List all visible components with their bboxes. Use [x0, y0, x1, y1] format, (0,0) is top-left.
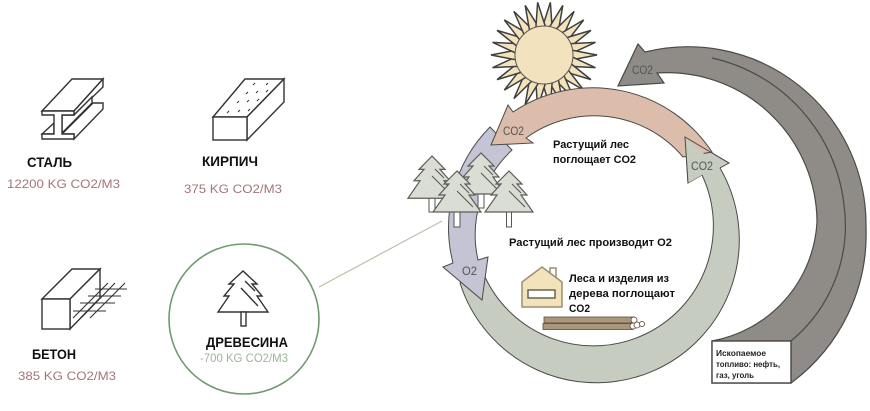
- text: wood stores CO2: [569, 273, 676, 315]
- circle outline: [169, 244, 319, 394]
- label: wood: ДРЕВЕСИНА: [206, 334, 288, 350]
- label: fossil fuel CO2: CO2: [632, 63, 653, 77]
- icon: tree: [218, 271, 268, 326]
- icon: steel beam: [42, 79, 103, 139]
- value: steel: 12200 KG CO2/M3: [7, 177, 120, 191]
- text: fossil fuels: [716, 348, 780, 380]
- label: brick: КИРПИЧ: [202, 153, 258, 169]
- text: wood stores CO2: Леса и изделия из: [569, 273, 670, 285]
- value: concrete: 385 KG CO2/M3: [18, 369, 116, 383]
- material: steel: [7, 79, 120, 191]
- text: forest absorbs CO2: [553, 139, 636, 166]
- connector line: [319, 221, 442, 287]
- text: fossil fuels: Ископаемое: [716, 348, 766, 358]
- text: fossil fuels: топливо: нефть,: [716, 359, 780, 369]
- label: O2: O2: [462, 264, 477, 278]
- value: wood: -700 KG CO2/M3: [200, 351, 288, 365]
- label: pink CO2: CO2: [503, 124, 524, 138]
- icon: brick: [213, 79, 284, 140]
- text: forest absorbs CO2: поглощает CO2: [553, 154, 636, 166]
- text: forest absorbs CO2: Растущий лес: [553, 139, 629, 151]
- arrow head: green over pink: [685, 137, 729, 183]
- icon: house: [522, 267, 562, 307]
- text: forest produces O2: Растущий лес производит O2: [509, 237, 672, 249]
- icon: concrete block with rebar: [42, 269, 127, 329]
- material: brick: [184, 79, 284, 196]
- icon: sun: [491, 2, 597, 108]
- arrow: fossil fuel CO2: [618, 44, 866, 383]
- material: wood circle: [169, 244, 319, 394]
- arrow: forest produces O2: [443, 127, 512, 300]
- text: wood stores CO2: дерева поглощают: [569, 288, 676, 300]
- label: steel: СТАЛЬ: [27, 154, 72, 170]
- label: concrete: БЕТОН: [32, 346, 76, 362]
- value: brick: 375 KG CO2/M3: [184, 182, 282, 196]
- box: fossil fuel: [712, 341, 791, 383]
- icon: logs: [543, 317, 645, 330]
- text: fossil fuels: газ, уголь: [716, 370, 754, 380]
- material: concrete: [18, 269, 127, 383]
- arrow: forest absorbs CO2: [491, 88, 712, 157]
- arrow: wood stores CO2: [460, 137, 739, 383]
- icon: forest trees: [408, 153, 533, 227]
- label: green CO2: CO2: [691, 159, 713, 173]
- text: wood stores CO2: CO2: [569, 303, 590, 315]
